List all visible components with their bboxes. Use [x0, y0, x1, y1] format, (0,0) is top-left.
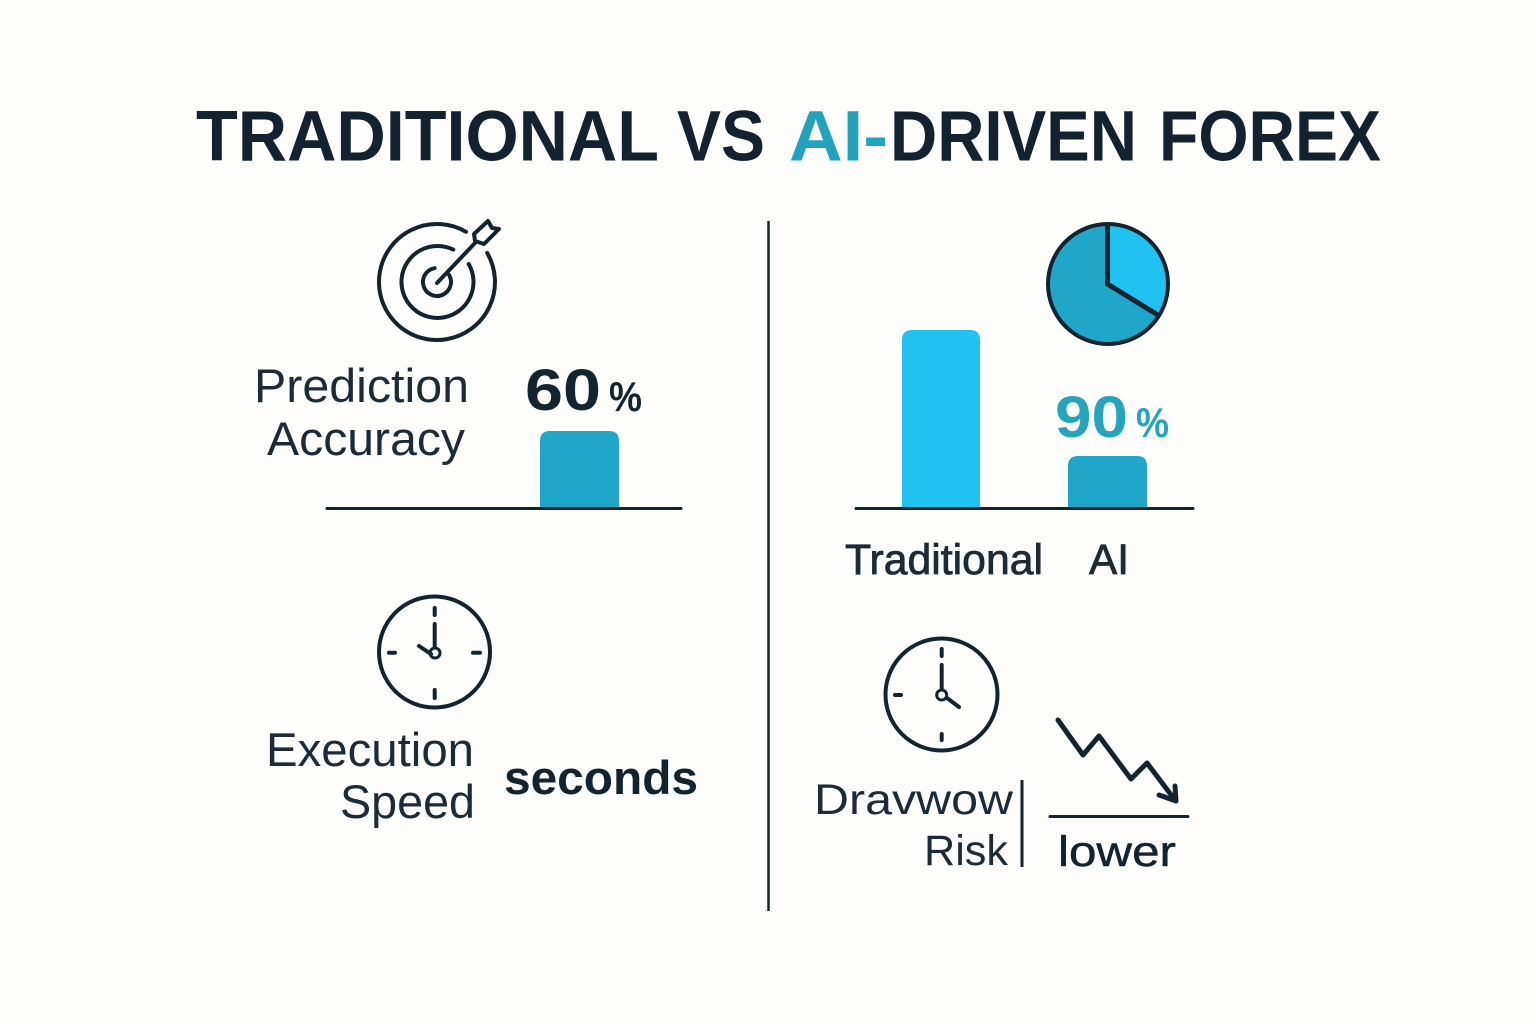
title: FOREX — [1159, 98, 1381, 176]
bar: 60 percent — [540, 431, 619, 508]
bar: traditional — [902, 330, 980, 508]
icon: pie chart — [1048, 224, 1168, 344]
icon: downward trend arrow — [1058, 720, 1176, 801]
stat: lower: lower — [1058, 828, 1176, 876]
stat: seconds: seconds — [504, 751, 698, 804]
bar: ai — [1068, 456, 1147, 508]
stat: 60 percent — [525, 358, 642, 423]
axis labels: Traditional — [845, 536, 1043, 584]
text: prediction accuracy label: Accuracy — [267, 412, 466, 465]
title: TRADITIONAL — [196, 98, 659, 176]
title: VS — [677, 98, 765, 176]
axis labels: AI — [1089, 536, 1129, 584]
text: execution speed label: Speed — [340, 775, 475, 828]
icon: target with arrow — [379, 221, 499, 340]
chart baseline — [327, 507, 681, 510]
label separator — [1020, 780, 1024, 867]
stat: 60 percent: 60 — [525, 358, 601, 423]
text: execution speed label: Execution — [266, 723, 474, 776]
panel: ai-driven — [814, 224, 1193, 876]
center divider — [767, 221, 770, 911]
stat: 90 percent: % — [1136, 399, 1169, 446]
icon: clock — [886, 638, 998, 750]
stat: 90 percent: 90 — [1055, 385, 1128, 450]
text: prediction accuracy label: Prediction — [254, 359, 469, 412]
stat: 90 percent — [1055, 385, 1169, 450]
text: drawdown risk label: Risk — [924, 827, 1008, 875]
text: drawdown risk label: Dravwow — [814, 776, 1014, 824]
stat: 60 percent: % — [609, 373, 642, 420]
title: DRIVEN — [890, 98, 1137, 176]
icon: clock — [379, 596, 490, 708]
title — [196, 98, 1381, 176]
lower divider — [1050, 815, 1188, 818]
text: prediction accuracy label — [254, 359, 469, 465]
text: drawdown risk label — [814, 776, 1014, 875]
text: execution speed label — [266, 723, 475, 828]
chart baseline — [856, 507, 1193, 510]
panel: traditional — [254, 221, 698, 828]
title: AI- — [789, 98, 888, 176]
